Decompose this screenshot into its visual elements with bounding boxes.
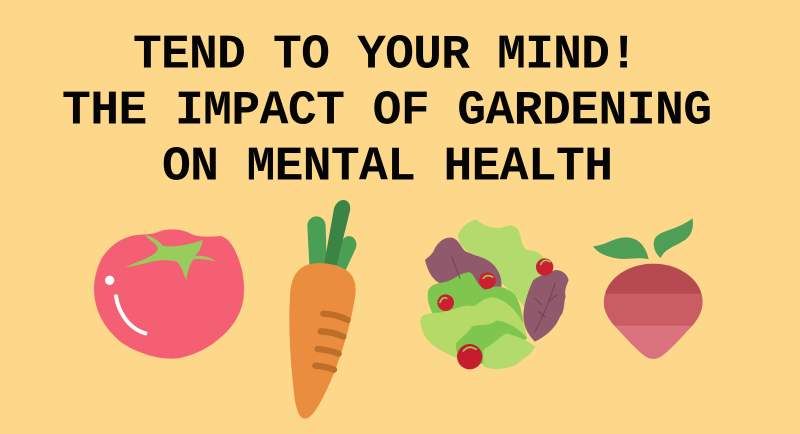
icon: beet [593,218,710,362]
light lettuce leaf [420,297,527,362]
icon: carrot [289,200,356,419]
icon: lettuce with tomatoes [420,220,569,369]
title: TEND TO YOUR MIND! [133,28,638,82]
green lettuce leaf [428,272,523,330]
beet right leaf [654,218,693,258]
back lettuce leaf [458,220,546,308]
carrot leaf left [307,216,327,265]
dark lettuce leaf left [425,238,501,292]
leaf veins [452,257,557,332]
carrot stripes [315,314,348,370]
title [62,28,712,194]
tomato stem [125,235,216,281]
icon: tomato [94,229,244,359]
title: ON MENTAL HEALTH [162,140,613,194]
tomato highlight curve [116,296,145,333]
bottom lettuce leaf [483,333,535,369]
beet left leaf [593,237,649,259]
tomato highlight dot [105,276,114,285]
carrot leaf centre [324,200,350,265]
title: THE IMPACT OF GARDENING [62,84,712,138]
carrot body [289,263,356,419]
dark lettuce leaf right [523,270,569,342]
beet body [604,264,703,359]
lower green leaf [456,320,527,365]
red tomatoes [437,258,553,369]
carrot leaf right [332,236,356,272]
